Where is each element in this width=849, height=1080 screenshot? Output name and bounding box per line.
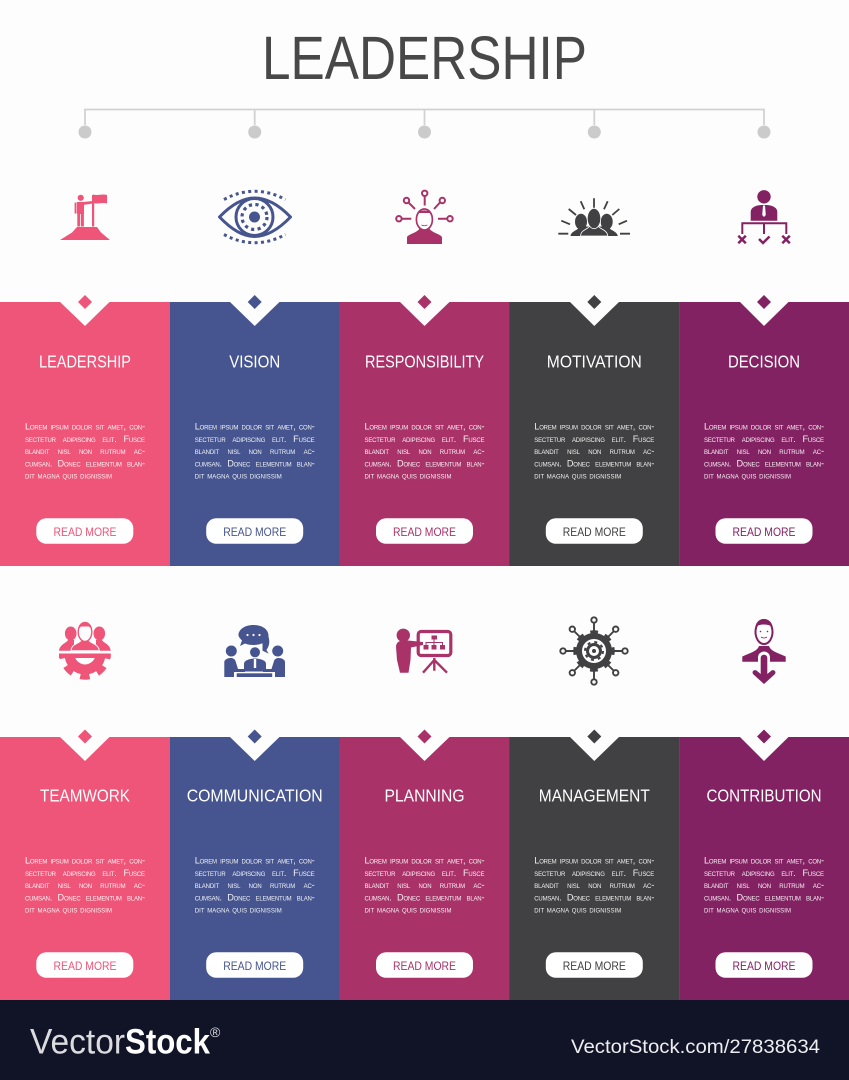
panel: planning: cumsan. Donec elementum blan- (364, 892, 484, 902)
panel: contribution: sectetur adipiscing elit. Fusce (704, 868, 824, 878)
panel: contribution: cumsan. Donec elementum blan- (704, 892, 824, 902)
panel: responsibility: dit magna quis dignissim (364, 470, 452, 480)
panel: management: sectetur adipiscing elit. Fusce (534, 868, 654, 878)
timeline connector with five dots (78, 110, 770, 138)
panel: leadership: Lorem ipsum dolor sit amet, con- (25, 422, 145, 432)
panel: leadership: sectetur adipiscing elit. Fusce (25, 434, 145, 444)
panel: vision: READ MORE (223, 525, 286, 539)
panel: management: READ MORE (563, 959, 626, 973)
panel: contribution: READ MORE (732, 959, 796, 973)
panel: decision: Lorem ipsum dolor sit amet, con- (704, 422, 824, 432)
panel: motivation: cumsan. Donec elementum blan- (534, 458, 654, 468)
panel: planning: READ MORE (393, 959, 456, 973)
panel: leadership: cumsan. Donec elementum blan- (25, 458, 145, 468)
panel: motivation: sectetur adipiscing elit. Fusce (534, 434, 654, 444)
panel: teamwork: blandit nisl non rutrum ac- (25, 880, 145, 890)
panel: management: MANAGEMENT (539, 786, 650, 806)
panel: leadership: blandit nisl non rutrum ac- (25, 446, 145, 456)
panel: planning: blandit nisl non rutrum ac- (364, 880, 484, 890)
panel: management: dit magna quis dignissim (534, 904, 621, 914)
panel: responsibility: RESPONSIBILITY (365, 352, 484, 372)
panel: vision: cumsan. Donec elementum blan- (195, 458, 315, 468)
footer bar: Stock (125, 1022, 210, 1062)
panel: decision: DECISION (728, 352, 800, 372)
panel: responsibility: READ MORE (393, 525, 456, 539)
panel: vision: dit magna quis dignissim (195, 470, 282, 480)
panel: teamwork: dit magna quis dignissim (25, 904, 112, 914)
panel: teamwork (0, 730, 170, 1000)
icon: gear with network nodes (560, 617, 628, 685)
panel: teamwork: cumsan. Donec elementum blan- (25, 892, 145, 902)
panel: responsibility (340, 295, 510, 566)
panel: responsibility: Lorem ipsum dolor sit amet, con- (364, 422, 484, 432)
panel: contribution: CONTRIBUTION (706, 786, 822, 806)
icon: presenter at a board (396, 629, 451, 673)
panel: vision (170, 295, 340, 566)
panel: management: cumsan. Donec elementum blan- (534, 892, 654, 902)
panel: leadership: dit magna quis dignissim (25, 470, 112, 480)
panel: responsibility: cumsan. Donec elementum blan- (364, 458, 484, 468)
panel: vision: VISION (229, 352, 280, 372)
panel: communication: Lorem ipsum dolor sit amet, con- (195, 856, 315, 866)
panel: motivation: READ MORE (563, 525, 626, 539)
panel: teamwork: READ MORE (54, 959, 116, 973)
panel: responsibility: blandit nisl non rutrum ac- (364, 446, 484, 456)
panel: planning: PLANNING (384, 786, 464, 806)
panel: decision (679, 295, 849, 566)
panel: leadership (0, 295, 170, 566)
panel: contribution (679, 730, 849, 1000)
panel: vision: Lorem ipsum dolor sit amet, con- (195, 422, 315, 432)
icon: leader with flag on a hill (60, 194, 110, 240)
panel: motivation: MOTIVATION (547, 352, 642, 372)
panel: planning: dit magna quis dignissim (364, 904, 452, 914)
icon: team above a gear (59, 622, 111, 677)
panel: motivation (509, 295, 679, 566)
panel: communication: READ MORE (223, 959, 286, 973)
panel: motivation: Lorem ipsum dolor sit amet, con- (534, 422, 654, 432)
panel: teamwork: TEAMWORK (40, 786, 130, 806)
panel: communication: dit magna quis dignissim (195, 904, 282, 914)
panel: communication (170, 730, 340, 1000)
panel: contribution: dit magna quis dignissim (704, 904, 791, 914)
footer bar: ® (210, 1024, 221, 1040)
panel: communication: cumsan. Donec elementum blan- (195, 892, 315, 902)
panel: decision: cumsan. Donec elementum blan- (704, 458, 824, 468)
panel: planning: sectetur adipiscing elit. Fusce (364, 868, 484, 878)
panel: planning: Lorem ipsum dolor sit amet, con- (364, 856, 484, 866)
panel: motivation: dit magna quis dignissim (534, 470, 621, 480)
icon: manager with decision tree (738, 190, 790, 243)
panel: contribution: blandit nisl non rutrum ac- (704, 880, 824, 890)
panel: management: blandit nisl non rutrum ac- (534, 880, 654, 890)
icon: meeting with speech bubbles (224, 625, 285, 677)
panel: teamwork: sectetur adipiscing elit. Fusce (25, 868, 145, 878)
panel: motivation: blandit nisl non rutrum ac- (534, 446, 654, 456)
panel: vision: sectetur adipiscing elit. Fusce (195, 434, 315, 444)
panel: decision: blandit nisl non rutrum ac- (704, 446, 824, 456)
panel: communication: blandit nisl non rutrum ac- (195, 880, 315, 890)
footer bar (0, 1000, 849, 1080)
icon: eye (220, 191, 290, 243)
panel: teamwork: Lorem ipsum dolor sit amet, con- (25, 856, 145, 866)
panel: leadership: LEADERSHIP (39, 352, 131, 372)
panel: vision: blandit nisl non rutrum ac- (195, 446, 315, 456)
icon: person with down arrow (742, 619, 786, 684)
title: LEADERSHIP (262, 24, 587, 92)
panel: communication: sectetur adipiscing elit. Fusce (195, 868, 315, 878)
panel: decision: sectetur adipiscing elit. Fusce (704, 434, 824, 444)
panel: planning (340, 730, 510, 1000)
panel: responsibility: sectetur adipiscing elit. Fusce (364, 434, 484, 444)
icon: group of three with rays (558, 198, 630, 236)
footer bar: Vector (30, 1022, 125, 1062)
panel: decision: dit magna quis dignissim (704, 470, 791, 480)
panel: management: Lorem ipsum dolor sit amet, con- (534, 856, 654, 866)
icon: person with connected nodes (396, 191, 453, 244)
panel: contribution: Lorem ipsum dolor sit amet, con- (704, 856, 824, 866)
panel: communication: COMMUNICATION (187, 786, 323, 806)
panel: leadership: READ MORE (54, 525, 116, 539)
panel: management (509, 730, 679, 1000)
footer bar: VectorStock.com/27838634 (571, 1037, 820, 1058)
panel: decision: READ MORE (732, 525, 796, 539)
